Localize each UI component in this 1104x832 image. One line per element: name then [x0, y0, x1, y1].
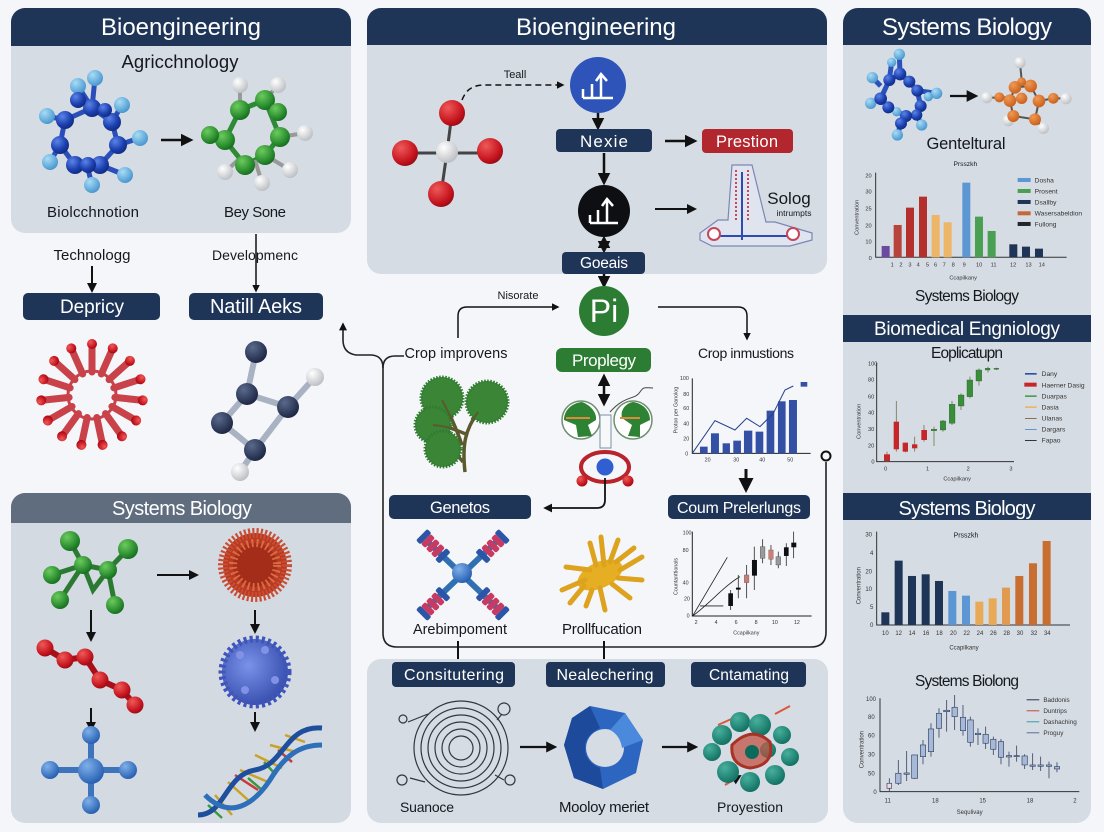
- pill: natill aeks: [189, 293, 323, 320]
- subheading: agricchnology: Agricchnology: [122, 51, 239, 72]
- chart: candlestick center: 0: [687, 613, 690, 619]
- pill: cntamating: Cntamating: [709, 667, 789, 684]
- legend: candlestick green red: [1024, 371, 1085, 445]
- chart: candlestick center: [673, 531, 812, 637]
- icon: pi circle: [579, 286, 629, 336]
- chart: bar chart top right: Conventration: [855, 200, 861, 235]
- connector: crop improvens to pi: Nisorate: [498, 290, 538, 302]
- chart: candlestick green red: [857, 362, 1085, 483]
- chart: bar chart top right: 8: [952, 263, 955, 269]
- chart: candlestick blue: 80: [868, 715, 875, 721]
- icon: yellow star: [562, 537, 642, 610]
- diagram: concentric circles: [397, 701, 515, 795]
- chart: bar chart top right: 11: [991, 263, 997, 269]
- chart: bar chart lower right: 5: [870, 605, 874, 611]
- legend: candlestick green red: Dargars: [1042, 427, 1066, 434]
- icon: black circle: [578, 185, 630, 237]
- chart: candlestick blue: 18: [1027, 798, 1034, 804]
- heading: systems biology left: Systems Biology: [112, 498, 252, 520]
- chart: candlestick center: Ccapilkany: [733, 631, 760, 637]
- arrows: [520, 746, 696, 748]
- pill: proplegy: Proplegy: [572, 351, 636, 370]
- pill: natill aeks: Natill Aeks: [210, 296, 302, 318]
- chart: bar chart lower right: Conventration: [857, 567, 863, 604]
- label: crop improvens: Crop improvens: [404, 346, 508, 362]
- chart: bar chart lower right: 30: [1017, 631, 1024, 637]
- chart: crop inmustions bars: 50: [787, 458, 793, 464]
- legend: top right chart: [1018, 177, 1082, 229]
- chart: bar chart top right: 13: [1025, 263, 1032, 269]
- chart: bar chart lower right: 24: [977, 631, 984, 637]
- label: proyestion: Proyestion: [717, 799, 783, 815]
- panel: left top bioengineering: [11, 8, 351, 233]
- chart: bar chart lower right: 14: [909, 631, 916, 637]
- chart: candlestick blue: 30: [868, 753, 875, 759]
- text: solog: intrumpts: [777, 208, 811, 218]
- text: solog: Solog: [767, 189, 811, 208]
- chart: crop inmustions bars: 80: [683, 392, 689, 398]
- chart: candlestick green red: 20: [868, 443, 874, 449]
- arrows: [91, 610, 255, 730]
- text: solog: [767, 189, 811, 218]
- chart: bar chart lower right: 22: [963, 631, 971, 637]
- chart: crop inmustions bars: 60: [683, 406, 689, 412]
- pill: goeais: [562, 252, 645, 274]
- pill: consitutering: Consitutering: [404, 667, 504, 684]
- molecule: blue: [39, 70, 148, 193]
- legend: candlestick green red: Duarpas: [1042, 393, 1067, 400]
- chart: candlestick center: 12: [794, 620, 800, 626]
- chart: candlestick green red: 100: [868, 362, 877, 368]
- chart: crop inmustions bars: 20: [683, 437, 689, 443]
- molecule: green: [201, 77, 313, 191]
- chart: bar chart top right: 20: [865, 223, 872, 229]
- molecules: blue to orange: [865, 49, 1072, 141]
- arrow: [665, 140, 695, 142]
- chart: crop inmustions bars: 20: [705, 458, 711, 464]
- chart: candlestick blue: 60: [868, 734, 875, 740]
- chart: crop inmustions bars: 40: [759, 458, 765, 464]
- icon: teal molecule: [703, 706, 799, 792]
- chart: candlestick green red: 0: [871, 460, 874, 466]
- label: systems biolong: Systems Biolong: [915, 673, 1019, 690]
- chart: candlestick green red: 60: [868, 394, 874, 400]
- icon: x shaped molecule: [416, 529, 510, 621]
- chart: bar chart lower right: 28: [1003, 631, 1011, 637]
- chart: bar chart lower right: Ccapilkany: [949, 645, 979, 651]
- chart: bar chart lower right: 30: [865, 533, 873, 539]
- molecule: green square: [43, 531, 138, 614]
- icon: blue spiky sphere: [222, 639, 288, 705]
- legend: top right chart: Dosha: [1035, 177, 1054, 184]
- chart: bar chart top right: 6: [934, 263, 937, 269]
- chart: bar chart top right: 1: [891, 263, 894, 269]
- chart: bar chart lower right: 34: [1044, 631, 1051, 637]
- icon: tree: [415, 377, 508, 472]
- chart: bar chart lower right: 16: [923, 631, 930, 637]
- heading: systems biology right: [843, 8, 1091, 45]
- panel: left bottom systems biology: [11, 493, 351, 823]
- legend: top right chart: Wasersabeldion: [1035, 211, 1082, 218]
- pill: depricy: [23, 293, 160, 320]
- chart: bar chart lower right: 26: [990, 631, 997, 637]
- chart: crop inmustions bars: 30: [733, 458, 739, 464]
- legend: candlestick blue: Proguy: [1043, 730, 1064, 737]
- molecule: blue cross: [41, 726, 137, 814]
- chart: bar chart lower right: 12: [895, 631, 903, 637]
- label: genteltural: Genteltural: [926, 135, 1006, 153]
- chart: bar chart top right: 30: [865, 189, 872, 195]
- arrow: figure to genetos: [545, 478, 605, 508]
- chart: candlestick center: 80: [683, 548, 689, 554]
- flow: technology column: Developmenc: [212, 247, 298, 263]
- chart: candlestick blue: 18: [932, 798, 939, 804]
- arrow: [603, 238, 605, 251]
- chart: candlestick green red: Conventration: [857, 404, 863, 439]
- pill: coum prelerlungs: [668, 495, 810, 519]
- pill: nexie: Nexie: [580, 132, 628, 151]
- chart: candlestick green red: Ccapilkany: [943, 477, 971, 483]
- legend: top right chart: Prosent: [1035, 188, 1058, 195]
- legend: top right chart: Fullong: [1035, 222, 1057, 229]
- pill: genetos: Genetos: [430, 499, 490, 517]
- arrow: [597, 113, 599, 128]
- legend: top right chart: Dsallby: [1035, 199, 1057, 206]
- arrow: [603, 153, 605, 183]
- legend: candlestick green red: Ulanas: [1042, 416, 1063, 423]
- chart: candlestick blue: 2: [1073, 798, 1077, 804]
- pill: nexie: [556, 129, 652, 152]
- arrow: [157, 574, 197, 576]
- chart: crop inmustions bars: [673, 376, 811, 464]
- flow: technology column: [54, 234, 298, 291]
- panel: center top bioengineering: [367, 8, 827, 274]
- chart: candlestick blue: 100: [866, 697, 877, 703]
- diagram: central figure: [562, 388, 653, 486]
- label: mooloy meriet: Mooloy meriet: [559, 799, 650, 816]
- chart: candlestick blue: Conventration: [859, 731, 865, 768]
- chart: bar chart lower right: 20: [950, 631, 957, 637]
- chart: bar chart top right: 3: [908, 263, 911, 269]
- chart: bar chart top right: 20: [865, 173, 872, 179]
- chart: bar chart top right: 5: [926, 263, 929, 269]
- icon: blue circle: [570, 57, 626, 113]
- chart: candlestick center: 40: [683, 580, 689, 586]
- chart: bar chart top right: 10: [865, 239, 872, 245]
- chart: bar chart top right: 2: [899, 263, 902, 269]
- pill: consitutering: [392, 662, 515, 687]
- arrow: [744, 469, 748, 490]
- label: crop inmustions: Crop inmustions: [698, 345, 794, 361]
- label: arebimpoment: Arebimpoment: [413, 622, 507, 638]
- heading: bioengineering left: Bioengineering: [101, 14, 261, 41]
- pill: genetos: [389, 495, 531, 519]
- chart: bar chart top right: 25: [865, 207, 872, 213]
- chart: candlestick blue: 15: [979, 798, 987, 804]
- chart: candlestick blue: [859, 695, 1079, 816]
- icon: dna helix: [198, 728, 322, 818]
- legend: candlestick blue: [1027, 697, 1077, 737]
- legend: candlestick green red: Fapao: [1042, 438, 1061, 445]
- chart: crop inmustions bars: 0: [685, 451, 688, 457]
- molecule: red ring: [36, 339, 148, 451]
- chart: candlestick center: 6: [735, 620, 738, 626]
- panel: right column: [843, 8, 1091, 823]
- chart: candlestick blue: 11: [885, 798, 892, 804]
- label: systems biology text: Systems Biology: [915, 288, 1019, 305]
- label: bey sone: Bey Sone: [224, 204, 286, 221]
- chart: bar chart top right: 10: [976, 263, 982, 269]
- icon: red spiky ball: [223, 533, 287, 597]
- chart: bar chart top right: 14: [1039, 263, 1045, 269]
- legend: candlestick green red: Dany: [1042, 371, 1058, 378]
- pill: nealechering: Nealechering: [556, 667, 654, 684]
- chart: candlestick green red: 30: [868, 427, 874, 433]
- chart: bar chart top right: [855, 161, 1082, 281]
- pill: cntamating: [691, 662, 806, 687]
- chart: candlestick center: 4: [715, 620, 718, 626]
- chart: bar chart top right: 9: [963, 263, 966, 269]
- arrow: [655, 208, 695, 210]
- label: prollfucation: Prollfucation: [562, 621, 642, 638]
- chart: candlestick green red: 1: [926, 467, 929, 473]
- icon: blue polygon ring: [564, 706, 643, 789]
- chart: bar chart lower right: [857, 532, 1070, 651]
- legend: candlestick blue: Baddonis: [1043, 697, 1070, 704]
- molecule: navy: [211, 341, 324, 481]
- chart: candlestick green red: 2: [967, 467, 970, 473]
- chart: crop inmustions bars: Proton per Ganolog: [673, 387, 679, 433]
- connector: outer loop: [343, 324, 830, 662]
- diagram: instrument: [700, 165, 812, 246]
- pill: prestion: Prestion: [716, 133, 778, 151]
- pill: depricy: Depricy: [60, 297, 124, 318]
- legend: candlestick blue: Duntrips: [1043, 708, 1067, 715]
- chart: bar chart top right: Ccapilkany: [949, 275, 977, 281]
- chart: candlestick green red: 0: [884, 467, 887, 473]
- chart: bar chart lower right: 4: [870, 551, 874, 557]
- pill: coum prelerlungs: Coum Prelerlungs: [677, 500, 801, 517]
- chart: candlestick center: 20: [684, 597, 690, 603]
- chart: candlestick green red: 3: [1009, 467, 1012, 473]
- chart: bar chart lower right: 10: [865, 587, 873, 593]
- panel: center bottom: [367, 659, 828, 823]
- chart: bar chart lower right: 32: [1031, 631, 1038, 637]
- chart: bar chart top right: 12: [1010, 263, 1016, 269]
- connector: crop improvens to pi: [458, 290, 558, 338]
- chart: candlestick blue: Sequlivay: [957, 810, 983, 816]
- legend: candlestick blue: Dashaching: [1043, 719, 1077, 726]
- molecule: red chain: [36, 640, 144, 714]
- pill: nealechering: [546, 662, 665, 687]
- arrow: goeais to pi: [603, 274, 605, 286]
- dashed arrow with label: [462, 69, 563, 100]
- chart: crop inmustions bars: 40: [683, 421, 689, 427]
- legend: candlestick green red: Haerner Dasig: [1042, 382, 1085, 389]
- chart: bar chart lower right: 20: [865, 570, 873, 576]
- chart: crop inmustions bars: 100: [680, 376, 689, 382]
- chart: candlestick blue: 50: [868, 772, 875, 778]
- chart: candlestick blue: 0: [873, 790, 877, 796]
- heading: systems biology 2: [843, 493, 1091, 520]
- molecule: red and white: [392, 100, 503, 207]
- chart: bar chart lower right: Prsszkh: [954, 532, 979, 539]
- pill: goeais: Goeais: [580, 255, 628, 272]
- chart: candlestick center: 100: [683, 531, 692, 537]
- chart: bar chart lower right: 0: [870, 623, 874, 629]
- heading: biomedical engniology: Biomedical Engniology: [874, 319, 1060, 340]
- pill: prestion: [702, 129, 793, 153]
- heading: systems biology 2: Systems Biology: [898, 498, 1036, 520]
- arrow: [161, 139, 191, 141]
- heading: bioengineering center: Bioengineering: [516, 14, 676, 41]
- chart: candlestick center: 10: [772, 620, 778, 626]
- pill: proplegy: [556, 348, 651, 372]
- dashed arrow with label: Teall: [504, 69, 526, 81]
- connector: pi to crop inmustions: [658, 307, 747, 339]
- chart: candlestick green red: 40: [868, 410, 874, 416]
- double arrow: [603, 376, 605, 404]
- chart: candlestick center: 8: [755, 620, 758, 626]
- label: eoplicatupn: Eoplicatupn: [931, 345, 1003, 362]
- chart: candlestick center: 2: [695, 620, 698, 626]
- chart: bar chart top right: 0: [869, 256, 872, 262]
- heading: systems biology right: Systems Biology: [882, 14, 1052, 41]
- chart: candlestick green red: 80: [868, 378, 874, 384]
- icon: pi circle: Pi: [590, 293, 618, 329]
- heading: biomedical engniology: [843, 315, 1091, 342]
- chart: bar chart lower right: 18: [936, 631, 943, 637]
- label: suanoce: Suanoce: [400, 799, 454, 815]
- chart: bar chart lower right: 10: [882, 631, 889, 637]
- legend: candlestick green red: Dasia: [1042, 404, 1059, 411]
- chart: bar chart top right: 4: [917, 263, 920, 269]
- label: biolcchnotion: Biolcchnotion: [47, 204, 139, 221]
- chart: bar chart top right: 7: [943, 263, 946, 269]
- flow: technology column: Technologg: [54, 247, 130, 264]
- chart: bar chart top right: Prsszkh: [953, 161, 977, 168]
- chart: candlestick center: Countanttionals: [673, 558, 679, 595]
